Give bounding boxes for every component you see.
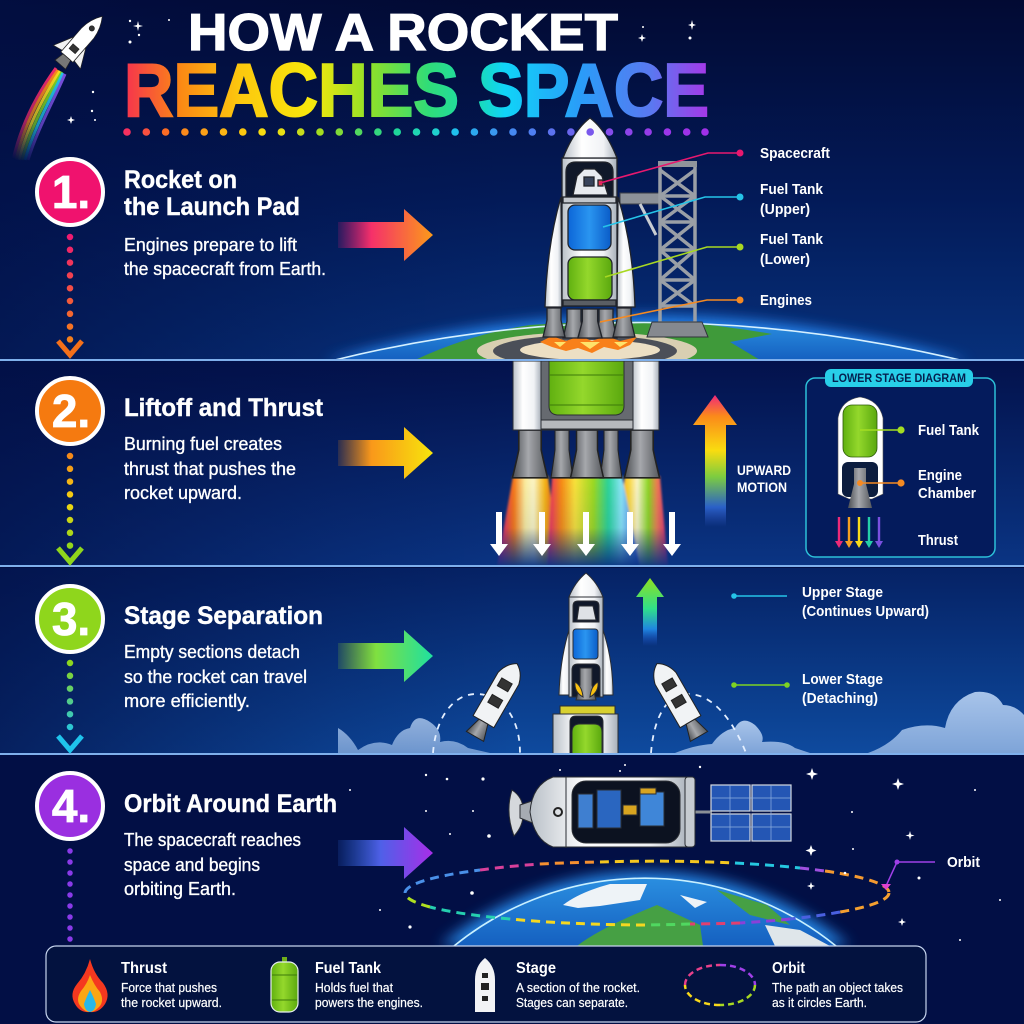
launch flames	[540, 336, 637, 353]
upward motion label: UPWARD	[737, 462, 791, 478]
title	[124, 4, 709, 132]
rocket body	[47, 5, 116, 76]
earth	[440, 872, 850, 946]
diagram labels	[918, 422, 980, 549]
thrust arrows	[490, 512, 681, 556]
upward motion arrow	[693, 395, 737, 527]
step 1 text: the spacecraft from Earth.	[124, 259, 326, 279]
step 1 arrow	[338, 209, 433, 261]
icon: stage	[475, 958, 495, 1012]
panel: step 4 orbit around earth	[404, 776, 980, 946]
step 1 text: Engines prepare to lift	[124, 235, 297, 255]
rocket labels: (Lower)	[760, 251, 810, 268]
diagram labels: Thrust	[918, 532, 958, 549]
solar panels	[695, 785, 791, 841]
orbit marker and leader	[881, 860, 935, 890]
spacecraft module	[509, 777, 695, 848]
step 4 badge: 4.	[52, 780, 90, 832]
title dotted rule	[123, 128, 709, 136]
step 1 text	[124, 166, 326, 279]
step 2 text: thrust that pushes the	[124, 459, 296, 479]
launch pad	[477, 334, 697, 359]
upward green arrow	[636, 578, 664, 646]
step 3 text: more efficiently.	[124, 691, 250, 711]
diagram title pill	[825, 369, 973, 387]
orbit label: Orbit	[947, 854, 980, 871]
icon: tank	[271, 957, 298, 1012]
stage labels	[802, 584, 929, 707]
lower green tank	[568, 257, 612, 300]
stage labels: (Detaching)	[802, 690, 878, 707]
mini thrust arrows	[835, 517, 883, 548]
step 4 text: space and begins	[124, 855, 260, 875]
step 2 text: Liftoff and Thrust	[124, 394, 324, 422]
step 3 text	[124, 602, 323, 711]
orbit path	[405, 861, 889, 925]
step 3 badge	[37, 586, 103, 652]
step 2 text	[124, 394, 324, 503]
rocket body	[562, 158, 617, 306]
rocket lower section close-up	[513, 361, 659, 430]
lower stage rocket	[553, 706, 618, 756]
step 3 text: Stage Separation	[124, 602, 323, 630]
rainbow trail	[13, 68, 65, 160]
step 3 text: Empty sections detach	[124, 642, 300, 662]
step 2 arrow	[338, 427, 433, 479]
step 3 dotted connector	[58, 663, 82, 750]
legend: stage: Stages can separate.	[516, 996, 628, 1010]
legend panel	[46, 946, 926, 1022]
legend: thrust: Force that pushes	[121, 981, 217, 995]
rocket labels: (Upper)	[760, 201, 810, 218]
diagram title pill: LOWER STAGE DIAGRAM	[832, 373, 966, 385]
capsule window	[566, 162, 613, 197]
step 1 badge	[37, 159, 103, 225]
title: REACHES SPACE	[124, 48, 709, 132]
step 4 dotted connector	[67, 851, 73, 941]
step 1 text: Rocket on	[124, 166, 237, 194]
lower stage diagram box	[806, 369, 995, 557]
step 4 text: Orbit Around Earth	[124, 790, 337, 818]
legend: thrust: Thrust	[121, 960, 168, 977]
diagram labels: Engine	[918, 467, 962, 484]
stage labels: (Continues Upward)	[802, 603, 929, 620]
step 3 text: so the rocket can travel	[124, 667, 307, 687]
step 4 badge	[37, 773, 103, 839]
upward motion label	[737, 462, 791, 495]
rocket labels: Spacecraft	[760, 145, 830, 162]
nose cone	[563, 118, 617, 158]
engine nozzles	[543, 308, 635, 338]
detached booster left	[466, 663, 521, 742]
rocket labels: Engines	[760, 292, 812, 309]
panel: step 2 liftoff and thrust	[0, 361, 1024, 566]
title: HOW A ROCKET	[188, 4, 618, 62]
legend: orbit: as it circles Earth.	[772, 996, 867, 1010]
legend: fuel tank: Fuel Tank	[315, 960, 381, 977]
stage labels: Lower Stage	[802, 671, 883, 688]
legend: stage: A section of the rocket.	[516, 981, 640, 995]
step 3 badge: 3.	[52, 593, 90, 645]
legend: stage: Stage	[516, 960, 556, 977]
launch tower	[620, 161, 708, 337]
step 2 dotted connector	[58, 456, 82, 562]
stage leader lines	[731, 593, 790, 688]
upward motion label: MOTION	[737, 479, 787, 495]
step 4 text	[124, 790, 337, 899]
earth horizon	[325, 316, 970, 362]
step 1 badge: 1.	[52, 166, 90, 218]
diagram labels: Chamber	[918, 485, 976, 502]
upper blue tank	[568, 205, 611, 250]
step 4 text: orbiting Earth.	[124, 879, 236, 899]
legend: stage	[475, 958, 640, 1012]
legend: fuel tank: powers the engines.	[315, 996, 423, 1010]
legend: orbit: Orbit	[772, 960, 806, 977]
step 3 arrow	[338, 630, 433, 682]
diagram labels: Fuel Tank	[918, 422, 980, 439]
rocket labels: Fuel Tank	[760, 181, 824, 198]
step 1 dotted connector	[58, 237, 82, 355]
panel: step 1 rocket on the launch pad	[0, 0, 1024, 370]
icon: small rocket with rainbow trail	[12, 16, 103, 160]
separation arcs	[433, 694, 746, 753]
stage labels: Upper Stage	[802, 584, 883, 601]
legend: thrust	[72, 959, 222, 1012]
legend: orbit	[685, 960, 903, 1010]
icon: flame	[72, 959, 108, 1012]
step 2 badge: 2.	[52, 385, 90, 437]
leader lines	[600, 153, 740, 322]
step 2 text: Burning fuel creates	[124, 434, 282, 454]
legend: thrust: the rocket upward.	[121, 996, 222, 1010]
section dividers	[0, 359, 1024, 755]
legend: fuel tank	[271, 957, 423, 1012]
step 2 badge	[37, 378, 103, 444]
step 4 text: The spacecraft reaches	[124, 830, 301, 850]
rocket labels: Fuel Tank	[760, 231, 824, 248]
mini stage	[838, 397, 883, 508]
step 4 arrow	[338, 827, 433, 879]
upper stage rocket	[559, 573, 613, 700]
icon: orbit ring	[685, 965, 755, 1005]
legend: fuel tank: Holds fuel that	[315, 981, 394, 995]
detached booster right	[653, 663, 708, 742]
rainbow exhaust plumes	[497, 476, 668, 566]
step 1 text: the Launch Pad	[124, 193, 300, 221]
rocket labels	[760, 145, 830, 309]
panel: step 3 stage separation	[0, 568, 1024, 756]
booster left	[545, 197, 562, 307]
legend: orbit: The path an object takes	[772, 981, 903, 995]
rocket: boosters, nozzles and body	[543, 118, 635, 338]
step 2 text: rocket upward.	[124, 483, 242, 503]
engine nozzles	[512, 430, 660, 478]
booster right	[617, 197, 635, 307]
clouds	[338, 692, 1024, 753]
